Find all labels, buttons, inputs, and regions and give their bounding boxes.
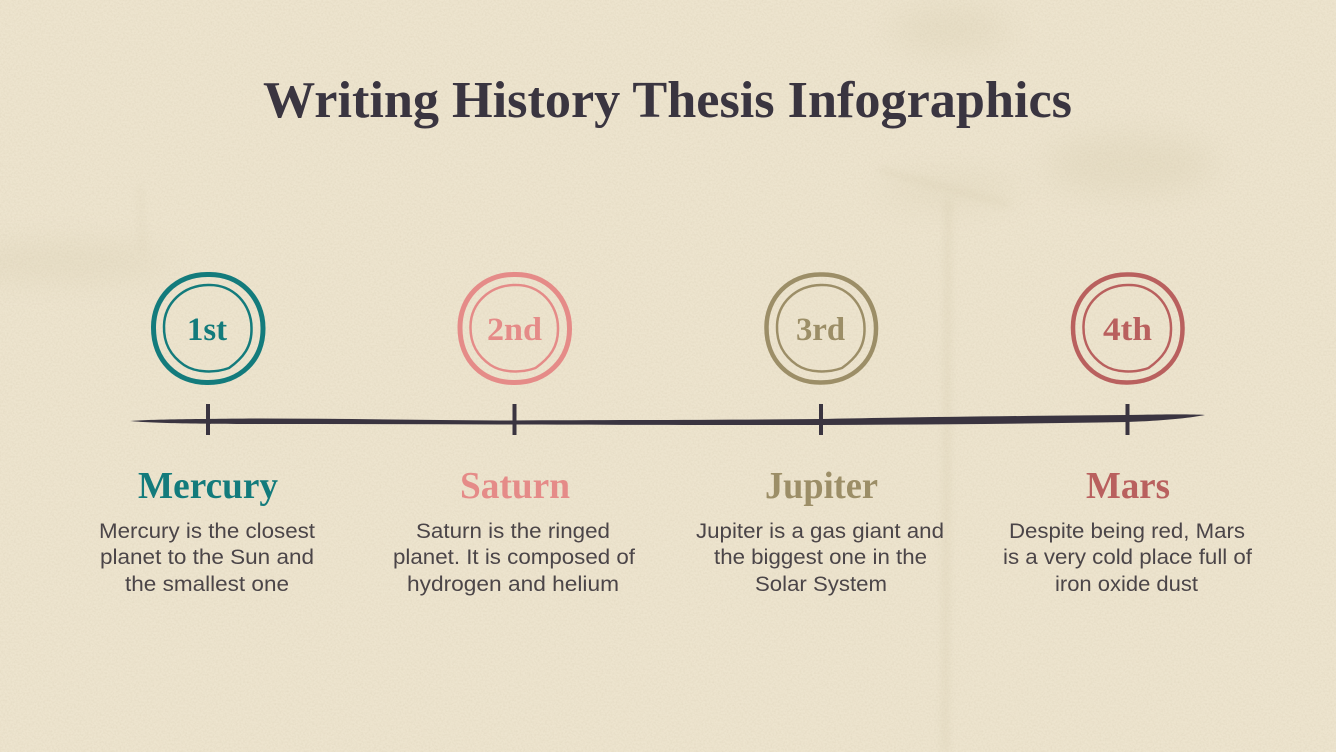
heading: Mars: Mars <box>1086 465 1170 507</box>
description: Mercury <box>99 520 315 596</box>
description: Mercury: Mercury is the closest <box>99 520 315 543</box>
description: Jupiter <box>696 520 944 596</box>
heading: Saturn: Saturn <box>460 465 570 507</box>
description: Saturn <box>393 520 635 596</box>
badge: 4th: 4th <box>1103 312 1152 348</box>
badge: 2nd <box>460 274 570 383</box>
column: Jupiter <box>696 274 944 596</box>
heading: Jupiter: Jupiter <box>765 465 878 507</box>
description: Saturn: hydrogen and helium <box>407 573 619 596</box>
column: Saturn <box>393 274 635 596</box>
description: Mercury: planet to the Sun and <box>100 546 314 569</box>
badge: 2nd: 2nd <box>487 312 542 348</box>
tick: Mars <box>1126 404 1130 435</box>
column: Mars <box>1003 274 1252 596</box>
badge: 3rd: 3rd <box>796 312 845 348</box>
badge: 1st <box>153 274 263 383</box>
description: Mercury: the smallest one <box>125 573 289 596</box>
timeline line <box>130 404 1205 435</box>
description: Mars <box>1003 520 1252 596</box>
badge: 4th <box>1073 274 1183 383</box>
badge: 3rd <box>766 274 876 383</box>
badge: 1st: 1st <box>187 312 227 348</box>
tick: Saturn <box>512 404 516 435</box>
description: Jupiter: Solar System <box>755 573 887 596</box>
description: Mars: Despite being red, Mars <box>1009 520 1245 543</box>
tick: Mercury <box>206 404 210 435</box>
title: Writing History Thesis Infographics <box>263 72 1072 129</box>
heading: Mercury: Mercury <box>138 465 278 507</box>
description: Saturn: Saturn is the ringed <box>416 520 610 543</box>
description: Mars: iron oxide dust <box>1055 573 1198 596</box>
description: Jupiter: Jupiter is a gas giant and <box>696 520 944 543</box>
description: Jupiter: the biggest one in the <box>714 546 927 569</box>
tick: Jupiter <box>819 404 823 435</box>
description: Saturn: planet. It is composed of <box>393 546 635 569</box>
column: Mercury <box>99 274 315 596</box>
description: Mars: is a very cold place full of <box>1003 546 1252 569</box>
